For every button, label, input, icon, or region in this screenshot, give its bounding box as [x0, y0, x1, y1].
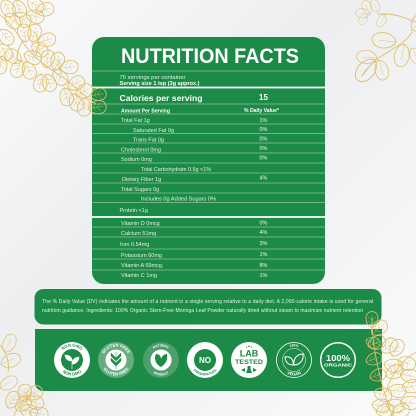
nutrient rows: 1% [260, 118, 268, 124]
decoration: top right moringa branch [351, 0, 416, 86]
calories row: 15 [259, 93, 268, 102]
vitamin and mineral rows [120, 220, 268, 279]
badge: 100% organic: 100% [326, 353, 350, 363]
vitamin and mineral rows: Vitamin C 1mg [121, 273, 157, 279]
badge: 100% organic: ORGANIC [324, 362, 353, 368]
panel: certification badges [35, 329, 382, 391]
calories row [120, 93, 268, 103]
badge: 100% organic [321, 343, 355, 377]
nutrient rows: Total Carbohydrate 0.5g <1% [141, 167, 211, 173]
nutrient rows: Includes 0g Added Sugars 0% [141, 196, 216, 202]
badge: lab tested [231, 342, 267, 378]
badge: no preservatives: PRESERVATIVES [193, 368, 216, 376]
nutrient rows [120, 118, 268, 214]
nutrient rows: Dietary Fiber 1g [122, 177, 161, 183]
vitamin and mineral rows: Iron 0.54mg [120, 242, 149, 248]
badge: lab tested: TESTED [235, 360, 264, 366]
decoration: top left moringa branch [0, 0, 107, 117]
badge: natural product: PRODUCT [153, 372, 168, 376]
badge: gluten free: GLUTEN FREE [104, 367, 129, 376]
nutrient rows: 0% [260, 127, 268, 133]
vitamin and mineral rows: Potassium 60mg [121, 253, 162, 259]
nutrient rows: Saturated Fat 0g [133, 128, 174, 134]
badge: non GMO [54, 342, 90, 378]
nutrient rows: Cholesterol 0mg [121, 148, 161, 154]
table header: Amount Per Serving [121, 108, 170, 114]
serving info: Serving size 1 tsp (3g approx.) [120, 81, 200, 87]
calories row: Calories per serving [120, 94, 203, 103]
decoration: bottom right moringa branch [364, 312, 416, 416]
vitamin and mineral rows: Vitamin A 69mcg, [121, 263, 164, 269]
badge: natural product [143, 342, 179, 378]
nutrient rows: 0% [260, 136, 268, 142]
nutrient rows: Trans Fat 0g [133, 138, 164, 144]
table header [121, 108, 280, 114]
badge: vegan: VEGAN [288, 371, 301, 376]
row rules [92, 71, 325, 270]
nutrient rows: 0% [260, 156, 268, 162]
vitamin and mineral rows: Vitamin D 0mcg [121, 221, 160, 227]
badge: no preservatives: NO [199, 356, 211, 365]
badge: natural product: NATURAL [152, 344, 169, 349]
badge: non GMO: NON GMO [61, 344, 82, 350]
panel: nutrition facts [92, 37, 325, 284]
nutrient rows: Protein <1g [120, 208, 148, 214]
badge: no preservatives [187, 342, 223, 378]
vitamin and mineral rows: 0% [260, 220, 268, 226]
panel: disclaimer note [34, 289, 382, 324]
decoration: bottom left moringa branch [0, 332, 49, 416]
table header: % Daily Value* [244, 108, 280, 114]
serving info: 75 servings per container [120, 75, 186, 81]
nutrient rows: Sodium 0mg [121, 157, 152, 163]
vitamin and mineral rows: 3% [260, 241, 268, 247]
badge: vegan: 100% [290, 344, 298, 348]
panel background [92, 37, 325, 284]
badge: lab tested: LAB [240, 348, 259, 358]
badge: gluten free [98, 342, 134, 378]
note text [42, 299, 373, 314]
vitamin and mineral rows: 4% [260, 230, 268, 236]
nutrient rows: 0% [260, 146, 268, 152]
serving info [120, 75, 200, 87]
note text: The % Daily Value (DV) indicates the amount of a nutrient in a single serving relative to a daily diet. A 2,000-calorie intake is used for general [42, 299, 373, 305]
vitamin and mineral rows: 8% [260, 263, 268, 269]
nutrient rows: 4% [260, 176, 268, 182]
vitamin and mineral rows: 1% [260, 273, 268, 279]
vitamin and mineral rows: Calcium 51mg [121, 231, 156, 237]
note text: nutrition guidance. Ingredients: 100% Organic Stem-Free Moringa Leaf Powder naturally dried without steam to maximize nutrient retention [42, 308, 363, 314]
nutrient rows: Total Sugars 0g [121, 187, 159, 193]
vitamin and mineral rows: 1% [260, 252, 268, 258]
badge: vegan [276, 342, 312, 378]
badge: non GMO: NON GMO [62, 370, 81, 376]
badge: gluten free: GLUTEN FREE [102, 344, 130, 354]
title: NUTRITION FACTS [121, 45, 299, 68]
nutrient rows: Total Fat 1g [121, 118, 150, 124]
